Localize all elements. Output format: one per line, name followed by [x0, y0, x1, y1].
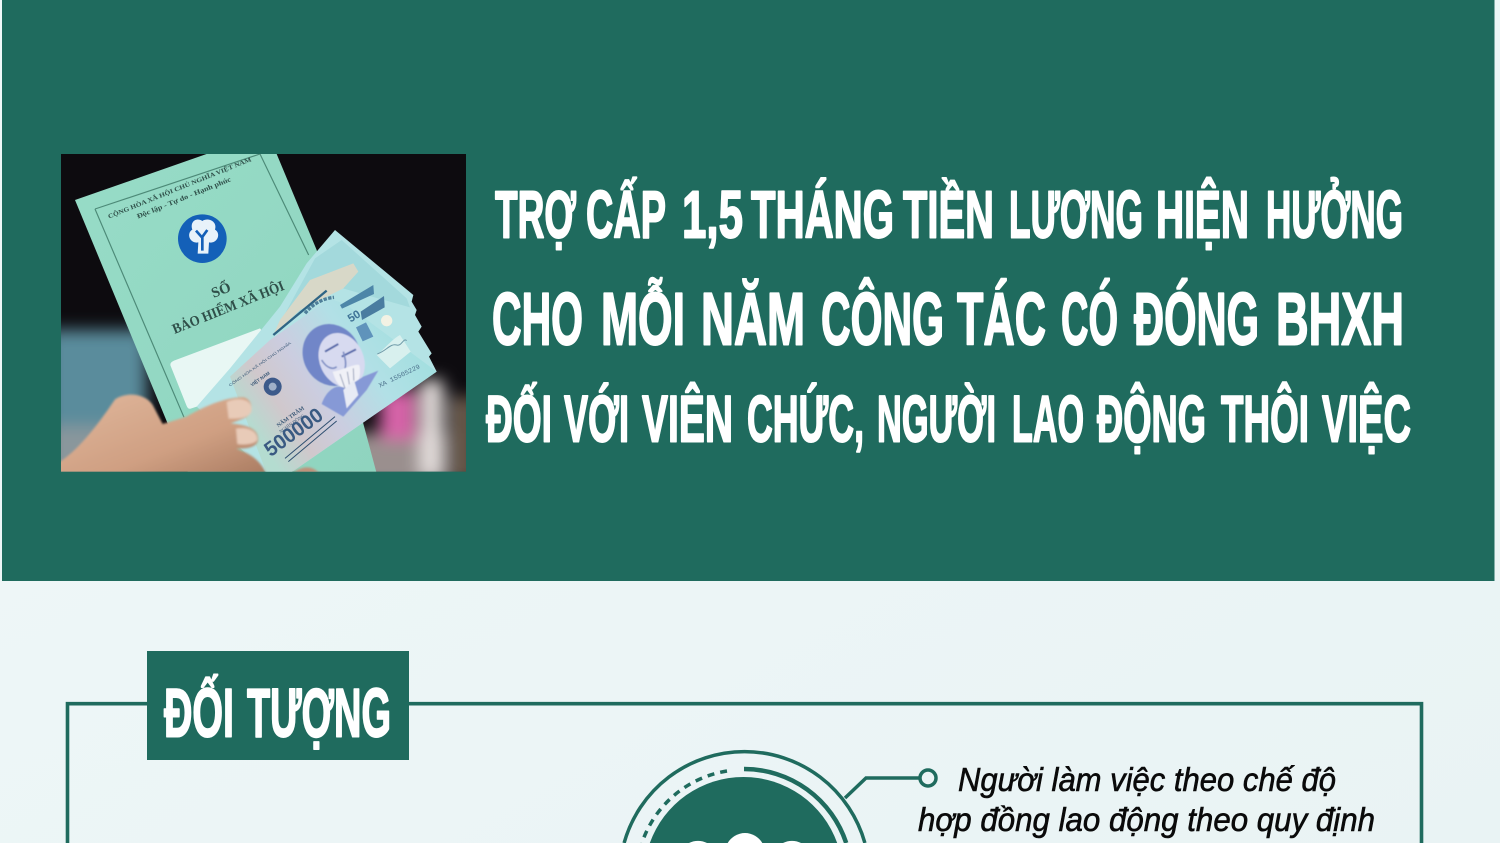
banknotes: CỘNG HÒA XÃ HỘI CHỦ NGHĨA [228, 340, 293, 387]
title: CÔNG [821, 278, 944, 360]
title: TRỢ [495, 178, 576, 252]
banknotes: XA 15505229 [377, 363, 421, 389]
title: LƯƠNG [1009, 178, 1143, 252]
banknotes: NGHÌN ĐỒNG [278, 413, 307, 435]
title: ĐỐI [486, 382, 552, 456]
title: THÁNG [751, 178, 894, 252]
photo: social insurance book and banknotes: CỘNG HÒA XÃ HỘI CHỦ NGHĨA VIỆT NAM [107, 155, 253, 221]
title: TÁC [957, 278, 1046, 360]
photo: social insurance book and banknotes: BẢO HIỂM XÃ HỘI [169, 276, 287, 338]
title: TIỀN [903, 178, 994, 252]
title: MỖI [601, 278, 685, 360]
title: LAO [1012, 382, 1084, 456]
banknotes: 50 [346, 308, 363, 325]
title: CHO [492, 278, 583, 360]
title: VIÊN [642, 382, 733, 456]
photo: social insurance book and banknotes: Độc lập - Tự do - Hạnh phúc [136, 175, 232, 221]
title: VỚI [564, 382, 629, 456]
circular icon: workers [624, 752, 865, 843]
title: HIỆN [1156, 178, 1249, 252]
title: CHỨC, [747, 382, 864, 456]
banknotes: VIỆT NAM [249, 369, 271, 387]
title: VIỆC [1322, 382, 1411, 456]
title: CẤP [586, 178, 666, 252]
title: ĐỘNG [1097, 382, 1206, 456]
title: ĐÓNG [1134, 278, 1259, 360]
text: audience description: hợp đồng lao động theo quy định [918, 801, 1375, 838]
title: BHXH [1276, 278, 1404, 360]
text: audience description: Người làm việc theo chế độ [958, 761, 1336, 798]
section heading: đối tượng: ĐỐI [164, 674, 234, 752]
section heading: đối tượng: TƯỢNG [247, 674, 391, 752]
section frame [68, 704, 1422, 843]
banknotes: NĂM TRĂM [275, 404, 306, 429]
photo: social insurance book and banknotes [61, 154, 466, 472]
title: NĂM [701, 278, 805, 360]
title: NGƯỜI [877, 382, 996, 456]
title: CÓ [1061, 278, 1118, 360]
connector line [845, 770, 936, 798]
title: THÔI [1221, 382, 1309, 456]
title: 1,5 [682, 178, 743, 252]
hand holding the notes [58, 395, 322, 477]
banknotes: 500000 [260, 404, 328, 461]
title [486, 178, 1411, 456]
section heading: đối tượng [147, 651, 409, 760]
text: audience description [918, 761, 1375, 838]
banknotes [197, 230, 437, 473]
header panel [2, 0, 1494, 581]
photo: social insurance book and banknotes: SỔ [208, 278, 233, 302]
